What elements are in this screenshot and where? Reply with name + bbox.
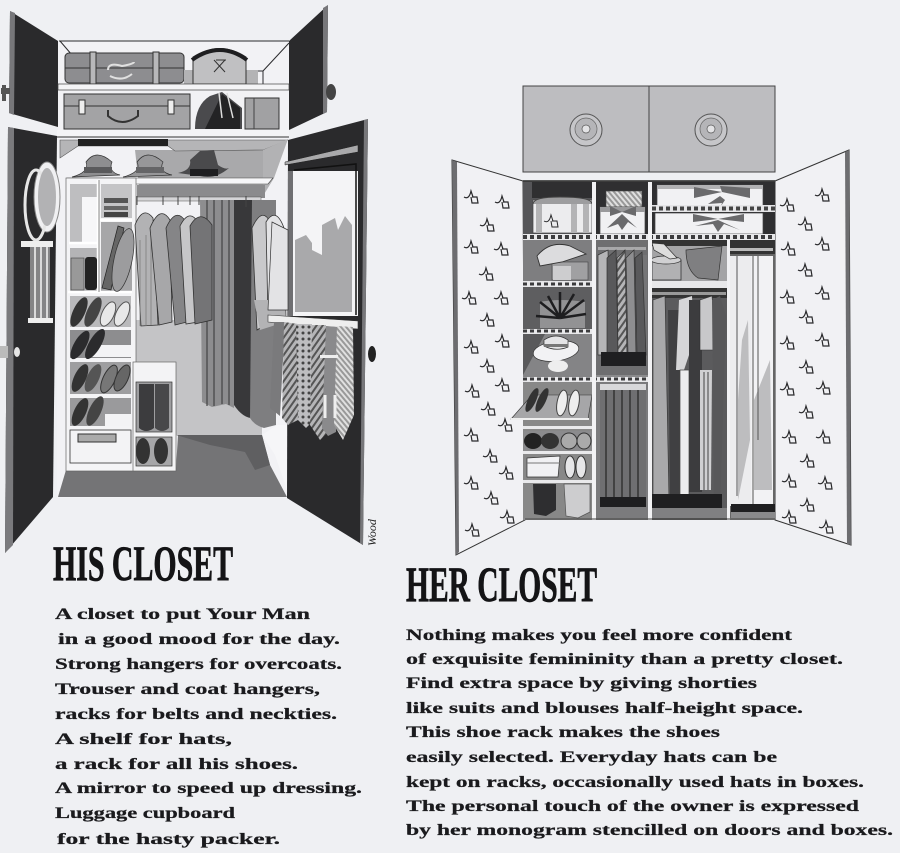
- text block: his closet: in a good mood for the day.: [58, 631, 340, 648]
- icon: hanging blouses: [598, 247, 647, 366]
- icon: stacked suitcases on top shelf: [65, 52, 184, 84]
- icon: plant hat: [536, 292, 586, 328]
- icon: right knob: [695, 114, 727, 146]
- icon: three hats on shelf: [72, 150, 229, 177]
- text block: his closet: A shelf for hats,: [55, 731, 232, 748]
- panel: interior: [511, 181, 775, 520]
- text block: his closet: Luggage cupboard: [55, 805, 236, 822]
- frilled shelf: [652, 205, 775, 212]
- signature: Wood: [365, 518, 379, 546]
- text block: his closet: Trouser and coat hangers,: [55, 681, 320, 698]
- icon: long curtained garments: [730, 248, 775, 518]
- icon: shelf: [58, 84, 289, 90]
- heading: his closet: HIS CLOSET: [53, 535, 233, 591]
- icon: small cases: [245, 98, 279, 129]
- heading: her closet: HER CLOSET: [406, 556, 597, 612]
- icon: tie rack: [268, 315, 358, 440]
- text block: her closet: like suits and blouses half-height space.: [406, 700, 803, 717]
- icon: trousers: [200, 200, 276, 428]
- illustration: her closet: [452, 86, 851, 555]
- icon: wide brim hat: [532, 336, 580, 372]
- left column rows: [523, 240, 592, 281]
- text block: his closet: A mirror to speed up dressing.: [55, 780, 362, 797]
- panel: right door with monograms: [775, 150, 851, 545]
- text block: his closet: Strong hangers for overcoats.: [55, 656, 342, 673]
- icon: hanging skirts: [596, 382, 648, 520]
- icon: hanging coats: [135, 196, 246, 326]
- left column top: dark wall: [523, 182, 592, 234]
- icon: hat box: [184, 48, 258, 84]
- lintel: [57, 130, 289, 137]
- monograms on right door: [780, 189, 833, 533]
- icon: jackets hanging on door side: [252, 215, 286, 330]
- icon: right closet door with mirror: [285, 119, 376, 545]
- floor: [58, 435, 287, 497]
- frilled shelves: [523, 234, 775, 382]
- icon: left closet door with racket: [0, 127, 60, 553]
- text block: his closet: a rack for all his shoes.: [55, 756, 298, 773]
- text block: her closet: of exquisite femininity than a pretty closet.: [406, 651, 843, 668]
- icon: travel bag: [195, 92, 242, 129]
- icon: hat box with monogram: [533, 197, 592, 233]
- panel: left door with monograms: [452, 160, 525, 555]
- text block: her closet: The personal touch of the owner is expressed: [406, 798, 860, 815]
- panel: luggage cupboard: [1, 5, 336, 130]
- shoes: [67, 295, 91, 329]
- middle column hanging section: [596, 240, 648, 375]
- middle column top: [596, 182, 648, 234]
- text block: his closet: [55, 606, 362, 848]
- icon: shoe racks: [511, 387, 592, 518]
- panel: closet interior: [57, 130, 289, 498]
- icon: flower hat: [537, 244, 588, 280]
- text block: her closet: This shoe rack makes the shoes: [406, 724, 720, 741]
- icon: hat box and gloves: [651, 243, 722, 280]
- icon: gift boxes: [600, 191, 645, 234]
- text block: her closet: kept on racks, occasionally used hats in boxes.: [406, 774, 864, 791]
- white posts: [592, 182, 730, 520]
- text block: her closet: by her monogram stencilled on doors and boxes.: [406, 822, 893, 839]
- shelf compartments: [70, 296, 131, 327]
- text block: her closet: Nothing makes you feel more confident: [406, 627, 793, 644]
- right column compartments: [652, 240, 727, 282]
- icon: dresses on rod: [652, 292, 727, 518]
- icon: left cupboard door: [1, 11, 58, 127]
- icon: hanging rod: [137, 197, 261, 201]
- icon: shelf unit: [66, 178, 138, 471]
- text block: his closet: A closet to put Your Man: [55, 606, 311, 623]
- icon: jacket sleeve over door: [254, 222, 288, 330]
- text block: her closet: easily selected. Everyday hats can be: [406, 749, 777, 766]
- icon: right cupboard door: [289, 5, 336, 130]
- icon: large suitcase: [64, 94, 190, 129]
- back wall: [135, 150, 263, 195]
- hat shelf: [67, 178, 273, 184]
- icon: left knob: [570, 114, 602, 146]
- text block: his closet: racks for belts and neckties.: [55, 706, 337, 723]
- illustration: his closet: [0, 5, 376, 553]
- panel: top cupboard with knobs: [523, 86, 775, 172]
- text block: her closet: [406, 627, 893, 839]
- monograms on left door: [462, 191, 514, 536]
- icon: shoe cube with boots: [133, 362, 176, 471]
- text block: his closet: for the hasty packer.: [57, 831, 280, 848]
- text block: her closet: Find extra space by giving shorties: [406, 675, 757, 692]
- right column top: [652, 182, 775, 234]
- icon: stacked hat boxes with bows: [655, 185, 763, 234]
